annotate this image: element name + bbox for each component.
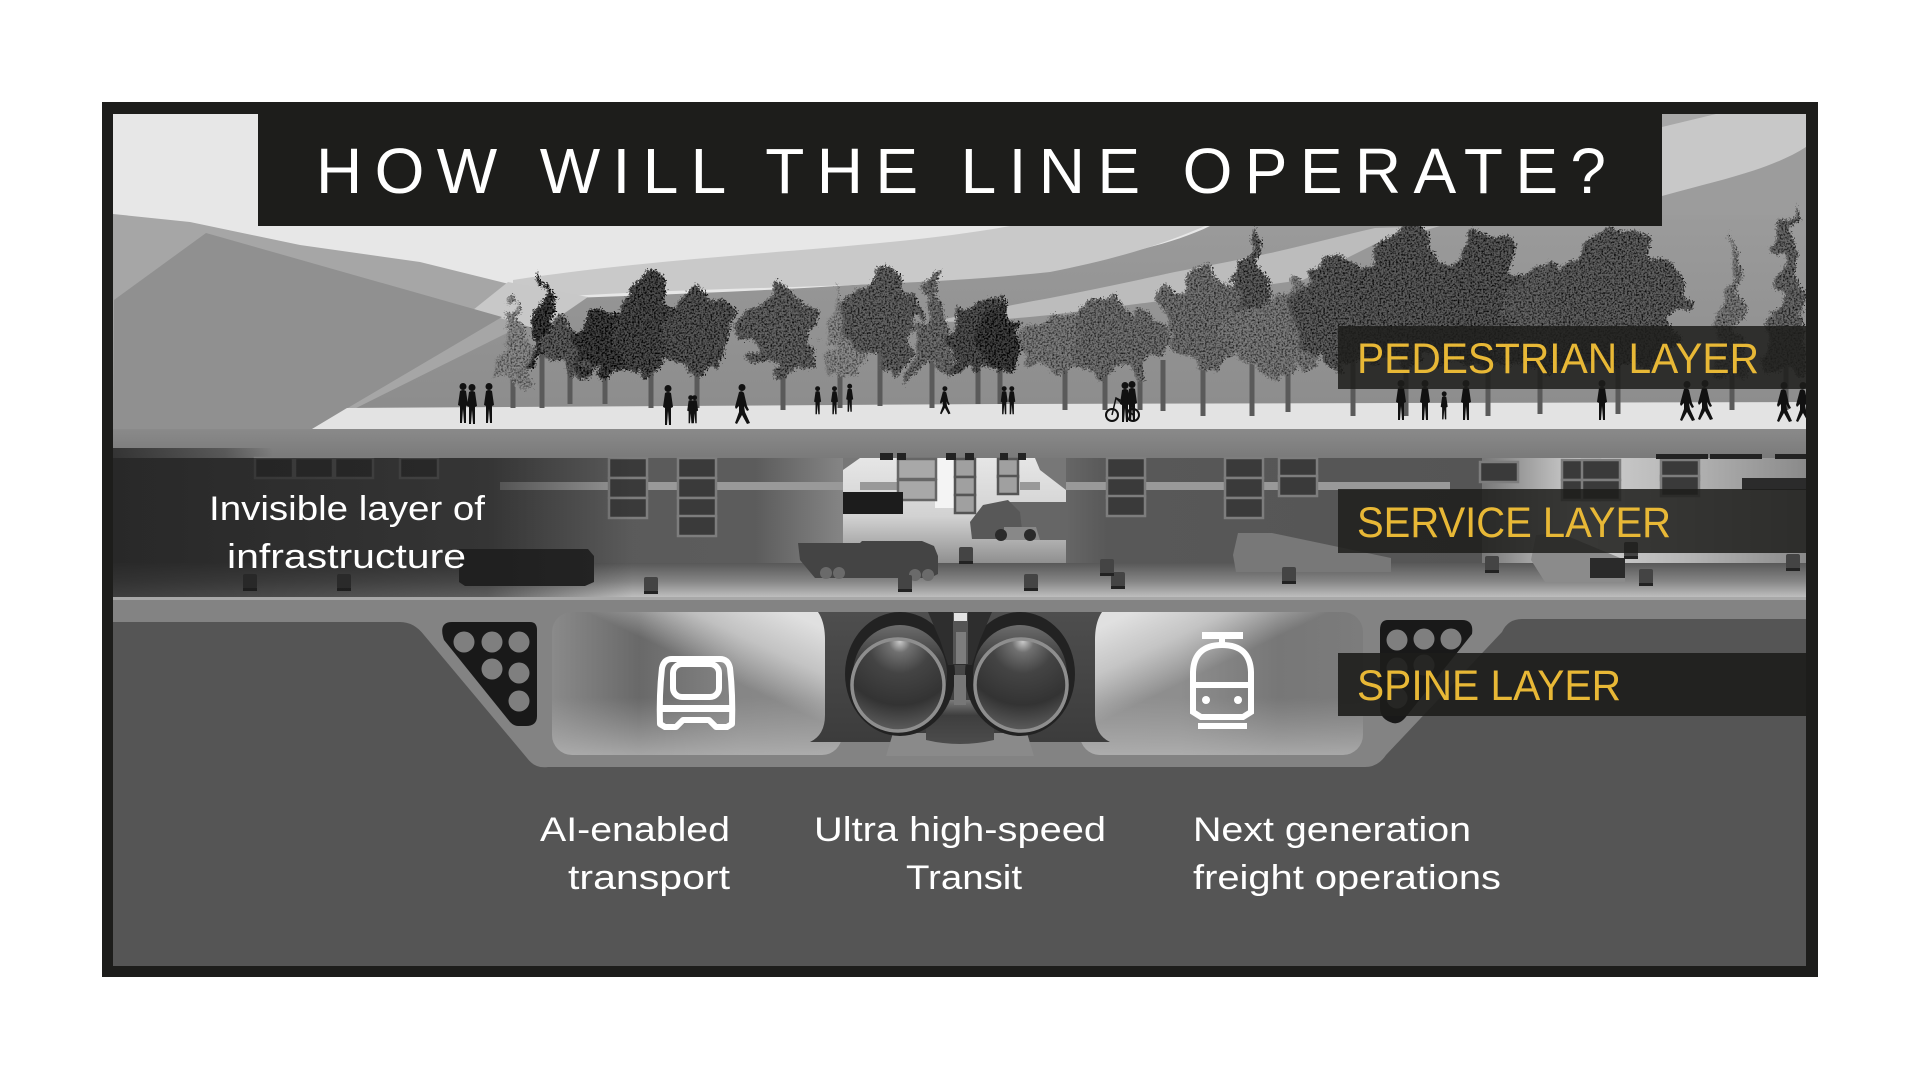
label: ultra high-speed transit: Ultra high-speed (814, 811, 1106, 849)
vehicles (459, 492, 1625, 586)
label: next generation freight operations (1193, 811, 1501, 897)
label: invisible layer of infrastructure: infrastructure (227, 538, 466, 576)
left duct bank (442, 622, 537, 726)
left tunnel: transport (552, 612, 842, 755)
label: invisible layer of infrastructure (209, 490, 486, 576)
label: next generation freight operations: freight operations (1193, 859, 1501, 897)
label: next generation freight operations: Next generation (1193, 811, 1471, 849)
tree trunks (510, 350, 1788, 416)
icon: autonomous pod (660, 659, 732, 727)
service floor (113, 563, 1806, 600)
label: ultra high-speed transit: Transit (906, 859, 1023, 897)
label: ultra high-speed transit (814, 811, 1106, 897)
right opening (1482, 458, 1806, 564)
cross-section illustration (113, 114, 1814, 966)
callout: spine layer: SPINE LAYER (1357, 662, 1621, 710)
callout: pedestrian layer: PEDESTRIAN LAYER (1357, 335, 1759, 383)
label: AI-enabled transport (540, 811, 731, 897)
label: AI-enabled transport: transport (568, 859, 731, 897)
pedestrians (458, 380, 1811, 425)
callout: service layer: SERVICE LAYER (1357, 499, 1671, 547)
curved canopy background (356, 114, 1806, 408)
ground mass (113, 600, 1806, 966)
label: invisible layer of infrastructure: Invisible layer of (209, 490, 486, 528)
bollards (243, 542, 1800, 594)
central opening (843, 458, 1066, 564)
ceiling fixtures (880, 453, 1806, 460)
sky backdrop (113, 114, 1210, 298)
service wall right (1066, 458, 1482, 563)
service level (113, 453, 1806, 600)
slab left shadow (113, 448, 273, 458)
right duct bank (1380, 620, 1472, 723)
pedestrian ground plane (312, 402, 1806, 429)
left building mass (113, 214, 588, 430)
storage racks (255, 458, 1699, 536)
icon: freight tram (1191, 632, 1253, 729)
central twin transit tubes (810, 612, 1110, 756)
upper slab (113, 429, 1806, 458)
trees (496, 203, 1814, 383)
right tunnel: freight (1080, 612, 1363, 755)
outer dark frame (102, 102, 1818, 977)
left darkened fade (113, 458, 633, 598)
callout: pedestrian layer (1338, 326, 1806, 389)
callout: service layer (1338, 489, 1806, 553)
concrete tunnel section (113, 600, 1806, 767)
wall light strip (500, 482, 1450, 490)
service wall left (113, 458, 843, 563)
title bar (258, 114, 1662, 226)
label: AI-enabled transport: AI-enabled (540, 811, 730, 849)
title: HOW WILL THE LINE OPERATE? (316, 135, 1606, 207)
callout: spine layer (1338, 653, 1806, 716)
